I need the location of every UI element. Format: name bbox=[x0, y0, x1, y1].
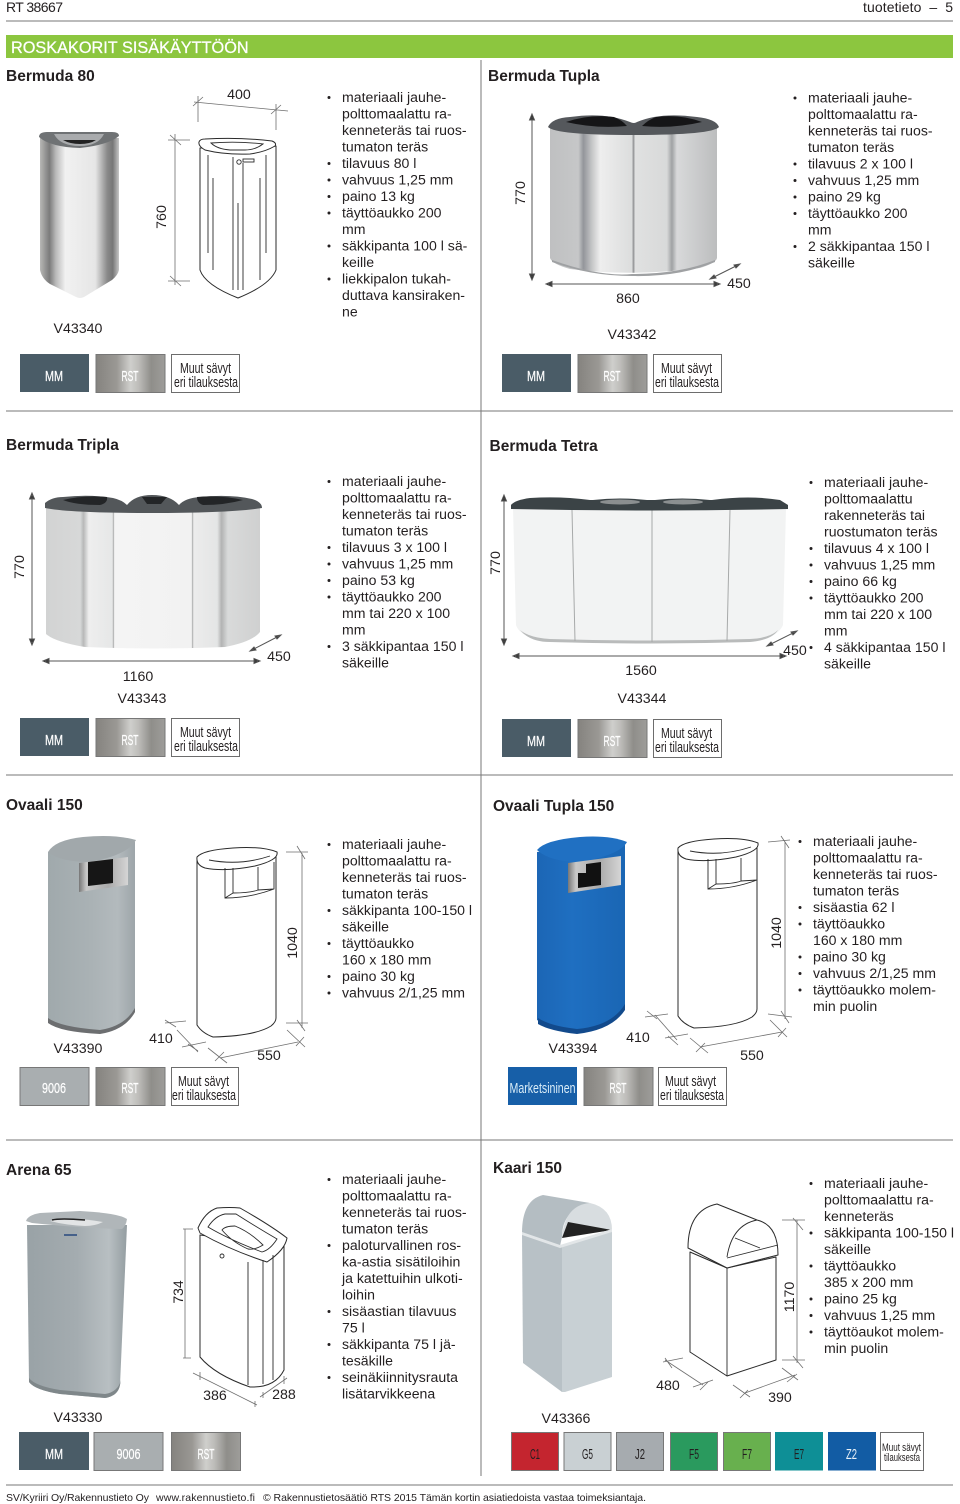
specification list: Ovaali 150: paino 30 kg bbox=[342, 968, 415, 984]
dimension: depth 450 bbox=[710, 264, 751, 292]
colour swatches: Kaari 150: J2 bbox=[635, 1447, 645, 1463]
specification list: Ovaali 150: polttomaalattu ra- bbox=[342, 852, 452, 868]
colour swatches: Kaari 150: C1 bbox=[530, 1447, 540, 1463]
colour swatches: Bermuda Tetra: RST bbox=[604, 733, 620, 750]
dimension: width 1560: 1560 bbox=[625, 663, 657, 679]
photo: Kaari 150 grey bin bbox=[522, 1195, 612, 1392]
specification list: Bermuda Tripla: täyttöaukko 200 bbox=[342, 588, 442, 604]
colour swatches: Bermuda 80 bbox=[20, 354, 240, 392]
colour swatches: Bermuda Tetra: Muut sävyt bbox=[661, 726, 712, 742]
specification list: Bermuda Tripla: mm bbox=[342, 622, 365, 638]
dimension: height 1040: 1040 bbox=[285, 927, 301, 959]
dimension: width 1560 bbox=[513, 654, 786, 679]
photo: Arena 65 grey bin bbox=[26, 1211, 127, 1398]
footer credits: SV/Kyriiri Oy/Rakennustieto Oy bbox=[6, 1492, 150, 1504]
specification list: Bermuda Tetra: materiaali jauhe- bbox=[824, 474, 928, 490]
technical drawing: Ovaali Tupla 150 bbox=[678, 838, 758, 1028]
colour swatches: Bermuda Tupla: MM bbox=[527, 368, 545, 385]
specification list: Bermuda Tripla bbox=[329, 473, 467, 670]
photo: Bermuda Tetra bin bbox=[511, 497, 788, 644]
specification list: Bermuda 80: vahvuus 1,25 mm bbox=[342, 172, 453, 188]
colour swatches: Bermuda Tripla: RST bbox=[122, 732, 138, 749]
panel: Bermuda 80 bbox=[6, 68, 468, 392]
specification list: Bermuda Tupla: mm bbox=[808, 222, 831, 238]
dimension: depth 450 bbox=[767, 631, 807, 659]
colour swatches: Ovaali 150 bbox=[20, 1068, 238, 1106]
specification list: Arena 65: paloturvallinen ros- bbox=[342, 1237, 461, 1253]
dimension: depth 410: 410 bbox=[626, 1030, 650, 1046]
specification list: Bermuda Tripla: kenneteräs tai ruos- bbox=[342, 506, 467, 522]
specification list: Kaari 150: täyttöaukko bbox=[824, 1258, 896, 1274]
specification list: Kaari 150: materiaali jauhe- bbox=[824, 1175, 928, 1191]
heading: Bermuda 80: Bermuda 80 bbox=[6, 68, 95, 85]
specification list: Bermuda Tetra: polttomaalattu bbox=[824, 490, 913, 506]
specification list: Ovaali Tupla 150: täyttöaukko bbox=[813, 916, 885, 932]
panel: Bermuda Tetra bbox=[488, 438, 945, 758]
panel: Arena 65 bbox=[6, 1162, 467, 1470]
specification list: Ovaali 150: tumaton teräs bbox=[342, 886, 428, 902]
dimension: depth 450: 450 bbox=[267, 649, 291, 665]
specification list: Bermuda Tupla: polttomaalattu ra- bbox=[808, 106, 918, 122]
specification list: Ovaali Tupla 150: sisäastia 62 l bbox=[813, 899, 894, 915]
specification list: Ovaali Tupla 150: paino 30 kg bbox=[813, 948, 886, 964]
specification list: Ovaali 150: kenneteräs tai ruos- bbox=[342, 869, 467, 885]
dimension: width 550 bbox=[208, 1030, 305, 1064]
heading: Arena 65: Arena 65 bbox=[6, 1162, 72, 1179]
specification list: Bermuda Tetra: vahvuus 1,25 mm bbox=[824, 556, 935, 572]
specification list: Ovaali Tupla 150: min puolin bbox=[813, 998, 877, 1014]
heading: Bermuda Tetra: Bermuda Tetra bbox=[490, 438, 598, 455]
specification list: Arena 65: materiaali jauhe- bbox=[342, 1171, 446, 1187]
specification list: Bermuda Tupla: vahvuus 1,25 mm bbox=[808, 172, 919, 188]
specification list: Kaari 150: 385 x 200 mm bbox=[824, 1274, 913, 1290]
dimension: width 1160 bbox=[43, 658, 260, 685]
specification list: Ovaali Tupla 150: polttomaalattu ra- bbox=[813, 850, 923, 866]
specification list: Kaari 150: min puolin bbox=[824, 1340, 888, 1356]
specification list: Bermuda 80: ne bbox=[342, 304, 358, 320]
colour swatches: Ovaali 150: 9006 bbox=[42, 1080, 66, 1097]
specification list: Bermuda Tetra: täyttöaukko 200 bbox=[824, 590, 924, 606]
specification list: Ovaali Tupla 150 bbox=[800, 833, 938, 1014]
specification list: Kaari 150: polttomaalattu ra- bbox=[824, 1192, 934, 1208]
dimension: width 390 bbox=[733, 1368, 798, 1406]
heading: Bermuda Tripla: Bermuda Tripla bbox=[6, 437, 119, 454]
panel: Bermuda Tupla bbox=[488, 68, 933, 392]
technical drawing: Kaari 150 bbox=[688, 1204, 778, 1376]
dimension: depth 288: 288 bbox=[272, 1387, 296, 1403]
specification list: Bermuda Tetra: ruostumaton teräs bbox=[824, 524, 938, 540]
specification list: Bermuda Tripla: tilavuus 3 x 100 l bbox=[342, 539, 447, 555]
specification list: Arena 65: tumaton teräs bbox=[342, 1220, 428, 1236]
dimension: depth 450: 450 bbox=[783, 643, 807, 659]
specification list: Ovaali 150: säkeille bbox=[342, 918, 389, 934]
dimension: height 770: 770 bbox=[12, 555, 28, 579]
specification list: Bermuda 80: täyttöaukko 200 bbox=[342, 204, 442, 220]
dimension: depth 480: 480 bbox=[656, 1378, 680, 1394]
specification list: Bermuda 80: mm bbox=[342, 221, 365, 237]
specification list: Ovaali Tupla 150: kenneteräs tai ruos- bbox=[813, 866, 938, 882]
heading: Kaari 150: Kaari 150 bbox=[493, 1160, 562, 1177]
specification list: Bermuda 80: keille bbox=[342, 254, 374, 270]
specification list: Kaari 150: vahvuus 1,25 mm bbox=[824, 1307, 935, 1323]
specification list: Ovaali Tupla 150: materiaali jauhe- bbox=[813, 833, 917, 849]
dimension: depth 410 bbox=[626, 1011, 688, 1046]
specification list: Arena 65: seinäkiinnitysrauta bbox=[342, 1369, 458, 1385]
specification list: Bermuda Tetra: 4 säkkipantaa 150 l bbox=[824, 639, 945, 655]
specification list: Ovaali 150: säkkipanta 100-150 l bbox=[342, 902, 472, 918]
colour swatches: Bermuda Tupla bbox=[502, 354, 722, 392]
photo: Ovaali Tupla 150 blue bin bbox=[537, 837, 627, 1034]
dimension: height 734: 734 bbox=[170, 1280, 186, 1304]
specification list: Bermuda Tripla: vahvuus 1,25 mm bbox=[342, 556, 453, 572]
specification list: Arena 65: säkkipanta 75 l jä- bbox=[342, 1336, 456, 1352]
colour swatches: Bermuda Tupla: eri tilauksesta bbox=[655, 375, 720, 391]
dimension: width 860 bbox=[546, 282, 720, 307]
specification list: Bermuda Tripla: materiaali jauhe- bbox=[342, 473, 446, 489]
dimension: width 400 bbox=[193, 87, 288, 130]
specification list: Ovaali Tupla 150: vahvuus 2/1,25 mm bbox=[813, 965, 936, 981]
specification list: Bermuda Tupla: kenneteräs tai ruos- bbox=[808, 122, 933, 138]
colour swatches: Bermuda Tetra: eri tilauksesta bbox=[655, 740, 720, 756]
colour swatches: Arena 65: MM bbox=[45, 1446, 63, 1463]
colour swatches: Ovaali Tupla 150: RST bbox=[610, 1080, 626, 1097]
heading: Ovaali 150: Ovaali 150 bbox=[6, 797, 83, 814]
panel: Ovaali 150 bbox=[6, 797, 472, 1106]
specification list: Bermuda Tupla bbox=[795, 90, 933, 270]
colour swatches: Ovaali Tupla 150 bbox=[508, 1067, 726, 1106]
specification list: Bermuda Tupla: täyttöaukko 200 bbox=[808, 205, 908, 221]
dimension: height 734 bbox=[170, 1229, 193, 1358]
colour swatches: Bermuda Tripla: MM bbox=[45, 732, 63, 749]
specification list: Bermuda 80: tumaton teräs bbox=[342, 138, 428, 154]
colour swatches: Ovaali Tupla 150: Muut sävyt bbox=[665, 1074, 716, 1090]
specification list: Bermuda Tripla: 3 säkkipantaa 150 l bbox=[342, 638, 463, 654]
specification list: Bermuda 80: paino 13 kg bbox=[342, 188, 415, 204]
colour swatches: Bermuda 80: MM bbox=[45, 368, 63, 385]
specification list: Bermuda 80: polttomaalattu ra- bbox=[342, 106, 452, 122]
specification list: Bermuda Tupla: materiaali jauhe- bbox=[808, 90, 912, 106]
dimension: depth 410 bbox=[149, 1020, 206, 1052]
dimension: depth 450 bbox=[250, 635, 291, 665]
colour swatches: Bermuda Tripla: Muut sävyt bbox=[180, 725, 231, 741]
dimension: depth 410: 410 bbox=[149, 1031, 173, 1047]
specification list: Bermuda Tupla: 2 säkkipantaa 150 l bbox=[808, 238, 929, 254]
dimension: width 550 bbox=[690, 1020, 787, 1064]
colour swatches: Kaari 150: Z2 bbox=[846, 1447, 857, 1463]
colour swatches: Bermuda 80: RST bbox=[122, 368, 138, 385]
specification list: Bermuda Tetra: mm bbox=[824, 622, 847, 638]
specification list: Bermuda Tetra: paino 66 kg bbox=[824, 573, 897, 589]
panel: Kaari 150 bbox=[493, 1160, 954, 1470]
specification list: Kaari 150: säkeille bbox=[824, 1241, 871, 1257]
code: V43390: V43390 bbox=[54, 1041, 103, 1057]
specification list: Kaari 150 bbox=[811, 1175, 954, 1356]
colour swatches: Kaari 150: F7 bbox=[742, 1447, 752, 1463]
photo: Bermuda Tripla steel bin bbox=[45, 495, 262, 648]
specification list: Arena 65 bbox=[329, 1171, 467, 1402]
specification list: Arena 65: ka-astia sisätiloihin bbox=[342, 1254, 460, 1270]
specification list: Bermuda Tripla: mm tai 220 x 100 bbox=[342, 605, 450, 621]
colour swatches: Kaari 150: F5 bbox=[689, 1447, 699, 1463]
specification list: Bermuda 80: materiaali jauhe- bbox=[342, 89, 446, 105]
specification list: Ovaali 150: vahvuus 2/1,25 mm bbox=[342, 984, 465, 1000]
dimension: height 770 bbox=[488, 495, 506, 645]
colour swatches: Kaari 150: G5 bbox=[582, 1447, 593, 1463]
dimension: height 760: 760 bbox=[154, 205, 170, 229]
colour swatches: Ovaali 150: Muut sävyt bbox=[178, 1074, 229, 1090]
colour swatches: Arena 65 bbox=[19, 1432, 240, 1470]
dimension: height 760 bbox=[154, 134, 190, 286]
specification list: Arena 65: sisäastian tilavuus bbox=[342, 1303, 456, 1319]
specification list: Kaari 150: täyttöaukot molem- bbox=[824, 1324, 944, 1340]
colour swatches: Ovaali Tupla 150: eri tilauksesta bbox=[660, 1088, 725, 1104]
dimension: width 390: 390 bbox=[768, 1390, 792, 1406]
specification list: Kaari 150: säkkipanta 100-150 l bbox=[824, 1224, 954, 1240]
code: V43330: V43330 bbox=[54, 1410, 103, 1426]
specification list: Ovaali 150: täyttöaukko bbox=[342, 935, 414, 951]
colour swatches: Arena 65: RST bbox=[198, 1446, 214, 1463]
dimension: width 386: 386 bbox=[203, 1388, 227, 1404]
dimension: depth 288 bbox=[260, 1376, 296, 1403]
specification list: Bermuda 80: kenneteräs tai ruos- bbox=[342, 122, 467, 138]
dimension: depth 450: 450 bbox=[727, 276, 751, 292]
specification list: Bermuda 80: duttava kansiraken- bbox=[342, 287, 465, 303]
heading: Bermuda Tupla: Bermuda Tupla bbox=[488, 68, 600, 85]
title bar bbox=[6, 35, 953, 58]
colour swatches: Kaari 150: tilauksesta bbox=[884, 1452, 921, 1464]
colour swatches: Arena 65: 9006 bbox=[116, 1446, 140, 1463]
specification list: Bermuda Tetra: mm tai 220 x 100 bbox=[824, 606, 932, 622]
colour swatches: Bermuda Tripla bbox=[20, 718, 240, 756]
specification list: Arena 65: polttomaalattu ra- bbox=[342, 1188, 452, 1204]
code: V43394: V43394 bbox=[549, 1041, 598, 1057]
dimension: width 550: 550 bbox=[740, 1048, 764, 1064]
dimension: depth 480 bbox=[656, 1358, 713, 1394]
colour swatches: Bermuda Tupla: RST bbox=[604, 368, 620, 385]
specification list: Arena 65: ja katettuihin ulkoti- bbox=[341, 1270, 463, 1286]
code: V43344: V43344 bbox=[618, 691, 667, 707]
technical drawing: Ovaali 150 bbox=[197, 848, 277, 1037]
footer credits: © Rakennustietosäätiö RTS 2015 Tämän kortin asiatiedoista vastaa toimeksiantaja. bbox=[263, 1492, 646, 1504]
footer credits: www.rakennustieto.fi bbox=[155, 1492, 255, 1504]
specification list: Bermuda Tripla: tumaton teräs bbox=[342, 522, 428, 538]
colour swatches: Bermuda 80: Muut sävyt bbox=[180, 361, 231, 377]
colour swatches: Bermuda 80: eri tilauksesta bbox=[174, 375, 239, 391]
dimension: width 550: 550 bbox=[257, 1048, 281, 1064]
code: V43340: V43340 bbox=[54, 321, 103, 337]
specification list: Bermuda Tetra: rakenneteräs tai bbox=[824, 507, 925, 523]
specification list: Kaari 150: kenneteräs bbox=[824, 1208, 894, 1224]
code: V43366: V43366 bbox=[542, 1411, 591, 1427]
dimension: height 770: 770 bbox=[488, 551, 504, 575]
dimension: height 770 bbox=[12, 493, 34, 645]
panel: Ovaali Tupla 150 bbox=[493, 798, 938, 1106]
dimension: height 770 bbox=[513, 114, 534, 280]
colour swatches: Ovaali 150: RST bbox=[122, 1080, 138, 1097]
specification list: Bermuda Tupla: tumaton teräs bbox=[808, 139, 894, 155]
dimension: width 386 bbox=[193, 1372, 257, 1407]
footer credits bbox=[6, 1492, 646, 1504]
specification list: Kaari 150: paino 25 kg bbox=[824, 1290, 897, 1306]
specification list: Bermuda Tripla: paino 53 kg bbox=[342, 572, 415, 588]
specification list: Ovaali Tupla 150: tumaton teräs bbox=[813, 882, 899, 898]
code: V43343: V43343 bbox=[118, 691, 167, 707]
dimension: height 1040 bbox=[285, 846, 308, 1031]
specification list: Bermuda Tripla: polttomaalattu ra- bbox=[342, 490, 452, 506]
photo: Bermuda 80 steel bin bbox=[39, 132, 119, 298]
dimension: height 1040: 1040 bbox=[769, 917, 785, 949]
specification list: Arena 65: kenneteräs tai ruos- bbox=[342, 1204, 467, 1220]
colour swatches: Bermuda Tripla: eri tilauksesta bbox=[174, 739, 239, 755]
dimension: width 860: 860 bbox=[616, 291, 640, 307]
specification list: Bermuda Tetra: tilavuus 4 x 100 l bbox=[824, 540, 929, 556]
specification list: Arena 65: loihin bbox=[342, 1286, 375, 1302]
specification list: Bermuda 80: säkkipanta 100 l sä- bbox=[342, 238, 468, 254]
dimension: height 1040 bbox=[768, 836, 792, 1023]
colour swatches: Bermuda Tupla: Muut sävyt bbox=[661, 361, 712, 377]
specification list: Bermuda 80 bbox=[329, 89, 468, 320]
specification list: Ovaali Tupla 150: 160 x 180 mm bbox=[813, 932, 902, 948]
specification list: Bermuda Tupla: paino 29 kg bbox=[808, 188, 881, 204]
technical drawing: Bermuda 80 bbox=[199, 138, 276, 298]
specification list: Ovaali 150: materiaali jauhe- bbox=[342, 836, 446, 852]
specification list: Bermuda Tripla: säkeille bbox=[342, 654, 389, 670]
specification list: Bermuda 80: liekkipalon tukah- bbox=[342, 270, 451, 286]
specification list: Ovaali Tupla 150: täyttöaukko molem- bbox=[813, 982, 936, 998]
specification list: Ovaali 150: 160 x 180 mm bbox=[342, 952, 431, 968]
specification list: Ovaali 150 bbox=[329, 836, 472, 1000]
panel: Bermuda Tripla bbox=[6, 437, 467, 756]
colour swatches: Bermuda Tetra: MM bbox=[527, 733, 545, 750]
title bar: ROSKAKORIT SISÄKÄYTTÖÖN bbox=[11, 39, 249, 57]
heading: Ovaali Tupla 150: Ovaali Tupla 150 bbox=[493, 798, 614, 815]
photo: Ovaali 150 grey bin bbox=[48, 836, 136, 1034]
dimension: height 1170 bbox=[782, 1218, 805, 1368]
colour swatches: Ovaali Tupla 150: Marketsininen bbox=[510, 1080, 576, 1097]
specification list: Bermuda 80: tilavuus 80 l bbox=[342, 155, 416, 171]
specification list: Arena 65: 75 l bbox=[342, 1320, 365, 1336]
dimension: width 1160: 1160 bbox=[123, 669, 153, 685]
technical drawing: Arena 65 bbox=[198, 1208, 287, 1387]
colour swatches: Kaari 150: Muut sävyt bbox=[882, 1442, 921, 1454]
specification list: Bermuda Tupla: tilavuus 2 x 100 l bbox=[808, 156, 913, 172]
code: V43342: V43342 bbox=[608, 327, 657, 343]
colour swatches: Kaari 150 bbox=[512, 1432, 924, 1470]
specification list: Bermuda Tupla: säkeille bbox=[808, 254, 855, 270]
dimension: width 400: 400 bbox=[227, 87, 251, 103]
colour swatches: Kaari 150: E7 bbox=[794, 1447, 804, 1463]
dimension: height 770: 770 bbox=[513, 181, 529, 205]
colour swatches: Bermuda Tetra bbox=[502, 719, 722, 758]
photo: Bermuda Tupla steel bin bbox=[548, 115, 719, 276]
dimension: height 1170: 1170 bbox=[782, 1282, 798, 1312]
specification list: Arena 65: tesäkille bbox=[342, 1352, 393, 1368]
specification list: Bermuda Tetra: säkeille bbox=[824, 656, 871, 672]
specification list: Arena 65: lisätarvikkeena bbox=[342, 1386, 435, 1402]
colour swatches: Ovaali 150: eri tilauksesta bbox=[172, 1088, 237, 1104]
specification list: Bermuda Tetra bbox=[811, 474, 945, 672]
